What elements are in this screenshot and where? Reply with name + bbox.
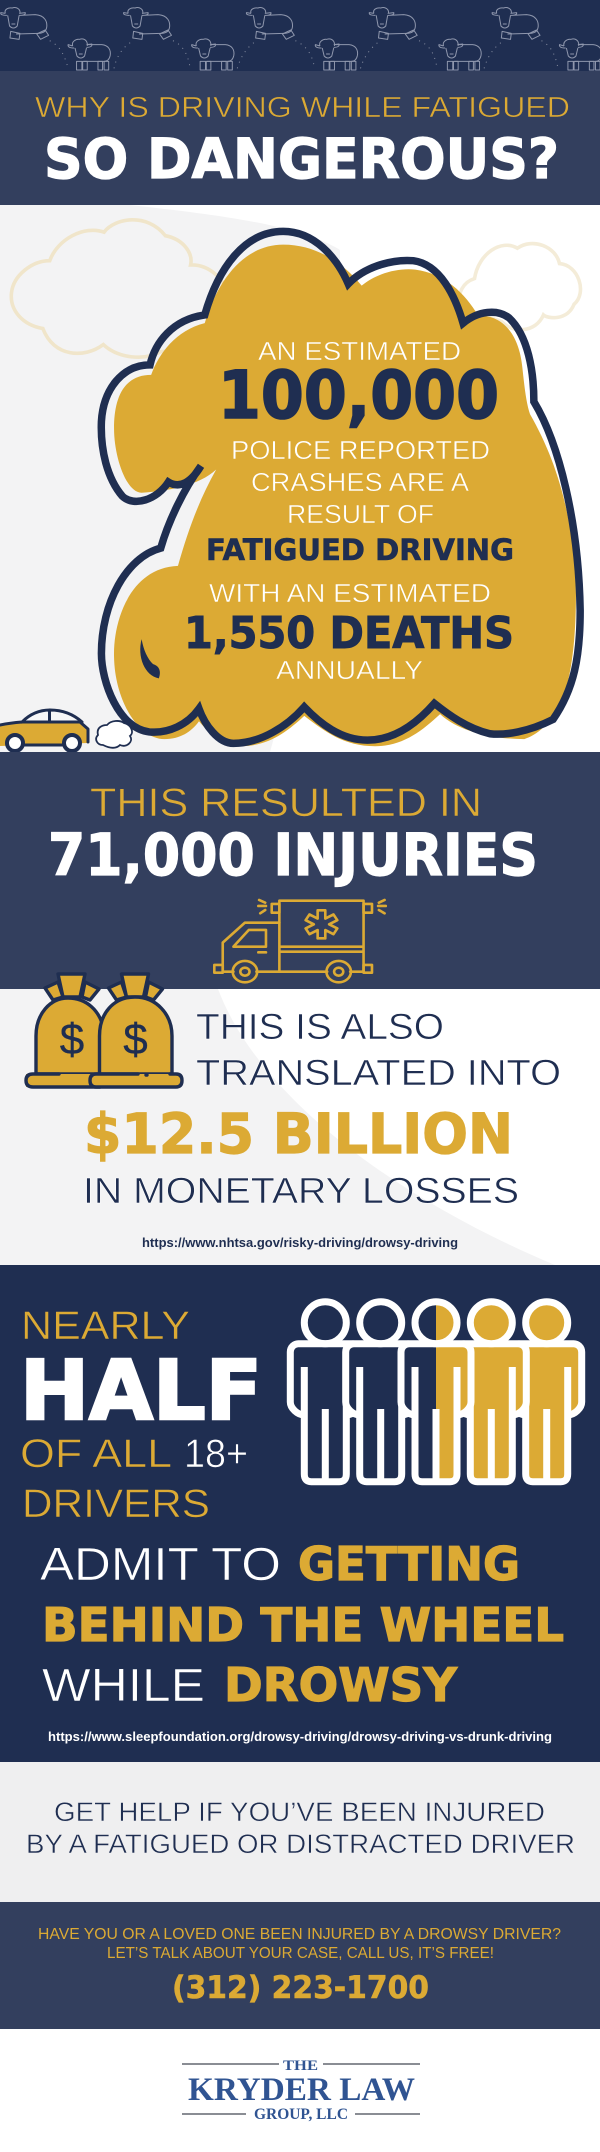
text: police reported: POLICE REPORTED [231,435,490,465]
logo: the kryder law group [182,2058,420,2123]
text: of all: OF ALL [20,1432,172,1476]
text: have you or a loved one: HAVE YOU OR A LOVED ONE BEEN INJURED BY A DROWSY DRIVER? [38,1926,561,1943]
illustration: exhaust cloud artwork [11,220,580,746]
text: with an estimated: WITH AN ESTIMATED [209,578,491,608]
logo: the kryder law group: KRYDER LAW [188,2072,415,2108]
text: result of: RESULT OF [287,499,434,529]
figure 4 [456,1302,526,1482]
text: admit to: ADMIT TO [40,1538,281,1590]
text: let's talk: LET’S TALK ABOUT YOUR CASE, CALL US, IT’S FREE! [107,1945,494,1962]
text: behind the wheel: BEHIND THE WHEEL [42,1598,564,1652]
stat: 1,550 deaths: 1,550 DEATHS [184,608,514,659]
icon: row of sheep with dotted jump arcs [1,8,600,70]
source: sleep foundation url: https://www.sleepfoundation.org/drowsy-driving/drowsy-driving-vs-drunk-driving [48,1730,552,1744]
text: annually: ANNUALLY [276,655,423,685]
text: fatigued driving: FATIGUED DRIVING [206,533,514,567]
right bag [90,974,182,1087]
text: while: WHILE [42,1659,205,1711]
text: get help line two: BY A FATIGUED OR DISTRACTED DRIVER [26,1829,575,1859]
icon: ambulance [214,900,386,982]
panel: injuries [0,752,600,989]
heading: so dangerous: SO DANGEROUS? [44,127,559,191]
text: get help line one: GET HELP IF YOU’VE BEEN INJURED [54,1797,545,1827]
panel: title [0,71,600,205]
icon: exhaust puff [96,721,132,748]
logo: the kryder law group: THE [283,2058,318,2074]
text: drowsy: DROWSY [224,1658,458,1712]
text: getting: GETTING [298,1537,520,1591]
panel: get help [0,1762,600,1902]
icon: pale background cloud right [459,244,580,330]
left bag: $ [60,1015,84,1064]
shape: navy cloud outline [101,231,580,743]
stat: 71,000 injuries: 71,000 INJURIES [48,821,538,889]
shape: navy comma accent [140,639,160,678]
stat: half: HALF [20,1344,262,1439]
panel: counting sheep banner [0,0,600,71]
text: crashes are a: CRASHES ARE A [251,467,470,497]
heading: this resulted in: THIS RESULTED IN [90,781,482,825]
text: phone number: (312) 223-1700 [172,1970,429,2006]
text: 18+: 18+ [184,1432,248,1476]
text: this is also: THIS IS ALSO [196,1006,444,1047]
logo: the kryder law group: GROUP, LLC [254,2106,348,2123]
figure 2 [346,1302,416,1482]
text: in monetary losses: IN MONETARY LOSSES [83,1170,519,1211]
figure 1 [290,1302,360,1482]
shape: gold cloud [114,245,576,746]
figure 3 half filled [401,1302,471,1482]
text: translated into: TRANSLATED INTO [196,1052,561,1093]
icon: pale background cloud left [11,220,230,357]
figure 5 [512,1302,582,1482]
right bag: $ [123,1015,148,1064]
source: nhtsa url: https://www.nhtsa.gov/risky-driving/drowsy-driving [142,1236,458,1250]
icon: five people half filled [290,1302,582,1482]
panel: call to action [0,1902,600,2029]
text: drivers: DRIVERS [22,1482,210,1526]
text: nearly: NEARLY [21,1304,190,1348]
icon: money bags [26,974,182,1087]
panel: nearly half of drivers [0,1265,600,1762]
text: an estimated: AN ESTIMATED [258,336,461,366]
stat: 100,000: 100,000 [218,357,499,434]
left bag [26,974,104,1087]
panel: cloud statistics [0,205,580,752]
stat: $12.5 billion: $12.5 BILLION [84,1102,513,1166]
panel: monetary losses [0,974,561,1265]
icon: car [0,710,88,751]
heading: why is driving while fatigued: WHY IS DRIVING WHILE FATIGUED [35,92,570,124]
